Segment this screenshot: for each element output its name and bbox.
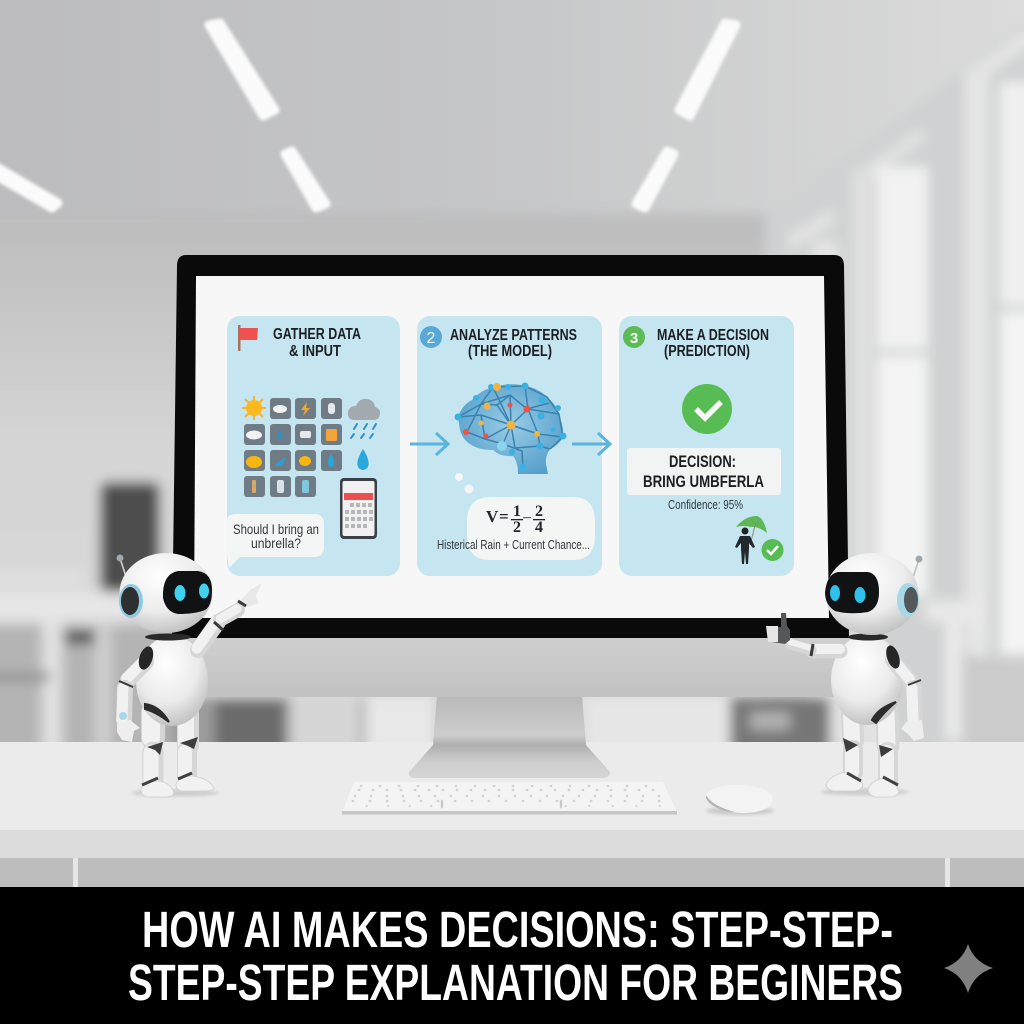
icon: red flag xyxy=(238,325,258,351)
eyes xyxy=(174,584,209,601)
body xyxy=(831,635,903,725)
decision box: DECISION: xyxy=(669,452,736,471)
neck ring xyxy=(145,634,191,640)
heading: gather data: GATHER DATA xyxy=(273,326,361,343)
heading: gather data: & INPUT xyxy=(289,343,341,360)
ceiling lights xyxy=(0,23,736,208)
title band xyxy=(0,887,1024,1024)
heading: analyze patterns: ANALYZE PATTERNS xyxy=(450,327,577,344)
arrow: step two to three xyxy=(572,433,610,455)
heading: make a decision xyxy=(657,327,769,360)
panel: gather data and input xyxy=(226,316,400,576)
formula bubble: Histerical Rain + Current Chance... xyxy=(437,538,590,552)
arrow: step one to two xyxy=(410,433,448,455)
neck ring xyxy=(848,634,888,640)
title xyxy=(128,901,903,1011)
icon: small check xyxy=(762,539,784,561)
robot: right thumbs up xyxy=(766,553,924,797)
formula xyxy=(486,503,545,536)
shadow xyxy=(821,788,909,796)
icon: water drop xyxy=(357,449,369,470)
panel: analyze patterns xyxy=(417,316,602,576)
decision box: BRING UMBFERLA xyxy=(643,472,764,491)
head xyxy=(826,553,918,635)
ear xyxy=(119,584,143,618)
formula: 4 xyxy=(535,519,543,536)
thought dots xyxy=(455,473,474,494)
extended arm xyxy=(766,613,840,656)
eyes xyxy=(830,585,866,603)
icon: phone calendar xyxy=(340,478,377,539)
icon: person with umbrella xyxy=(735,516,767,564)
icon: large check xyxy=(682,384,732,434)
hanging arm xyxy=(884,644,924,741)
antenna xyxy=(911,556,922,584)
body xyxy=(136,636,208,726)
far leg xyxy=(176,712,214,791)
icon: sparkle xyxy=(944,944,993,993)
icon grid: weather data xyxy=(242,396,342,497)
hip joint xyxy=(872,702,896,723)
panel: make a decision xyxy=(619,316,794,576)
visor xyxy=(163,571,212,614)
speech bubble: question: Should I bring an xyxy=(233,522,319,537)
heading: make a decision: MAKE A DECISION xyxy=(657,327,769,344)
step number 3: 3 xyxy=(630,330,638,347)
step number 2: 2 xyxy=(427,330,436,347)
raised arm xyxy=(197,583,262,650)
icon: brain network xyxy=(454,382,566,474)
mouse xyxy=(706,785,774,815)
ear xyxy=(897,583,919,617)
confidence text: Confidence: 95% xyxy=(668,498,743,512)
antenna xyxy=(116,554,128,583)
keyboard xyxy=(342,782,677,814)
formula: 2 xyxy=(513,519,521,536)
leg xyxy=(868,712,899,797)
heading: analyze patterns: (THE MODEL) xyxy=(468,343,552,360)
robot: left pointing xyxy=(116,553,262,797)
decision box xyxy=(627,448,781,495)
leg xyxy=(826,712,863,791)
shadow xyxy=(131,790,219,796)
monitor stand xyxy=(409,695,610,778)
near leg xyxy=(141,712,174,797)
icon: rain cloud xyxy=(348,399,380,438)
lowered arm xyxy=(117,645,156,742)
monitor xyxy=(172,255,849,697)
speech bubble: question xyxy=(226,514,324,568)
speech bubble: question: unbrella? xyxy=(251,536,301,551)
step number 3 xyxy=(623,326,645,348)
formula bubble xyxy=(437,497,595,560)
heading: analyze patterns xyxy=(450,327,577,360)
desk xyxy=(0,742,1024,888)
heading: gather data xyxy=(273,326,361,360)
formula: = xyxy=(499,507,509,526)
step number 2 xyxy=(420,326,442,348)
formula: V xyxy=(486,507,499,526)
formula: 1 xyxy=(513,503,521,520)
hip joint xyxy=(145,704,169,722)
screen xyxy=(194,276,829,618)
head xyxy=(120,553,212,633)
visor xyxy=(825,572,879,613)
formula: 2 xyxy=(535,503,543,520)
heading: make a decision: (PREDICTION) xyxy=(664,343,750,360)
